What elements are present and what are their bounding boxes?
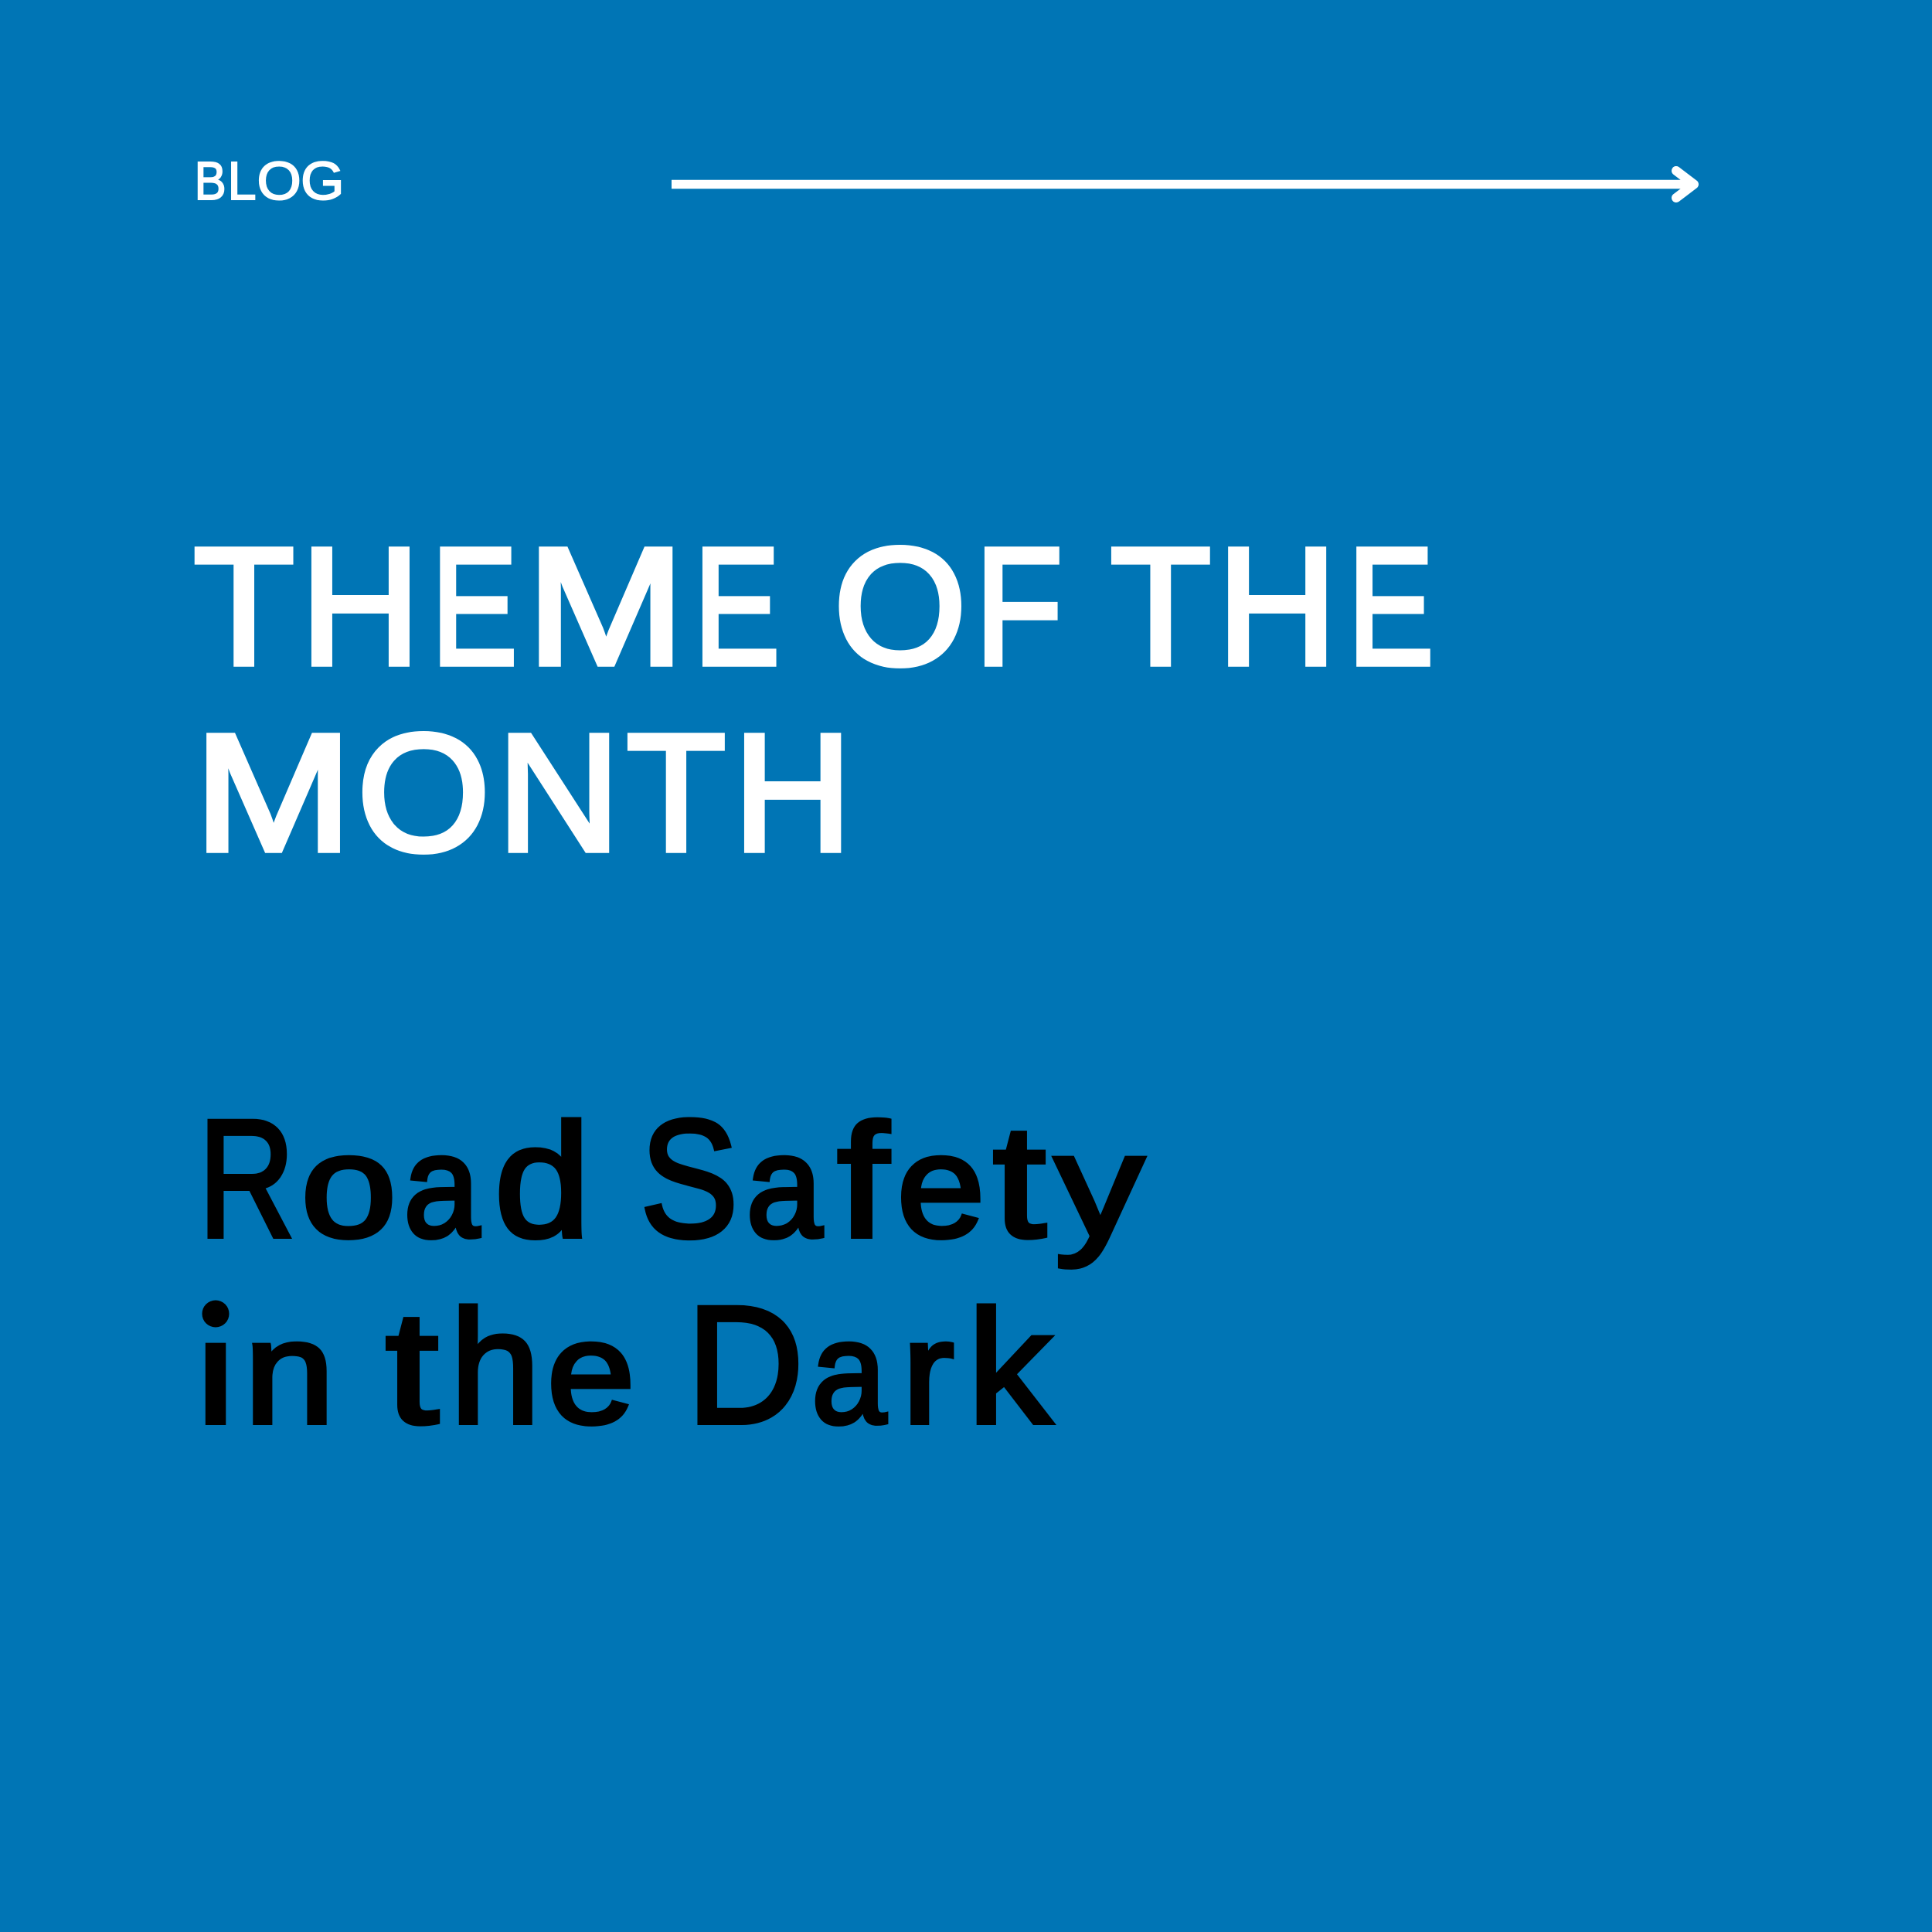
icon: long arrow [672, 171, 1694, 198]
heading: THEME OF THE MONTH: E [694, 512, 780, 699]
heading: THEME OF THE MONTH: T [627, 699, 726, 886]
heading: THEME OF THE MONTH: F [975, 512, 1063, 699]
subheading: Road Safety in the Dark: k [968, 1277, 1052, 1458]
subheading: Road Safety in the Dark: a [811, 1291, 886, 1454]
subheading: Road Safety in the Dark: f [837, 1091, 889, 1271]
heading: THEME OF THE MONTH: H [733, 699, 852, 886]
label: BLOG: L [227, 151, 257, 211]
subheading: Road Safety in the Dark: t [993, 1092, 1046, 1270]
subheading: Road Safety in the Dark: a [747, 1104, 822, 1268]
label: BLOG [195, 151, 345, 211]
subheading: Road Safety in the Dark: i [196, 1291, 235, 1454]
heading: THEME OF THE MONTH: O [357, 699, 490, 886]
heading: THEME OF THE MONTH: M [526, 512, 685, 699]
subheading: Road Safety in the Dark: R [199, 1085, 295, 1272]
label: BLOG: O [257, 151, 301, 211]
heading: THEME OF THE MONTH: E [1348, 512, 1434, 699]
subheading: Road Safety in the Dark: h [450, 1277, 540, 1458]
label: BLOG: B [195, 151, 226, 211]
heading: THEME OF THE MONTH: E [431, 512, 517, 699]
heading: THEME OF THE MONTH: T [1111, 512, 1211, 699]
subheading: Road Safety in the Dark: y [1055, 1102, 1144, 1268]
subheading: Road Safety in the Dark [196, 1085, 1144, 1458]
heading: THEME OF THE MONTH [193, 512, 1434, 886]
subheading: Road Safety in the Dark: a [403, 1104, 480, 1268]
subheading: Road Safety in the Dark: n [244, 1291, 335, 1454]
label: BLOG: G [301, 151, 345, 211]
heading: THEME OF THE MONTH: O [834, 512, 967, 699]
subheading: Road Safety in the Dark: r [902, 1291, 954, 1454]
subheading: Road Safety in the Dark: D [686, 1271, 804, 1458]
heading: THEME OF THE MONTH: M [194, 699, 352, 886]
subheading: Road Safety in the Dark: e [896, 1104, 985, 1268]
subheading: Road Safety in the Dark: t [386, 1278, 439, 1457]
subheading: Road Safety in the Dark: S [640, 1085, 738, 1272]
heading: THEME OF THE MONTH: H [301, 512, 420, 699]
heading: THEME OF THE MONTH: T [193, 512, 294, 699]
subheading: Road Safety in the Dark: e [547, 1291, 635, 1454]
subheading: Road Safety in the Dark: d [495, 1091, 590, 1271]
heading: THEME OF THE MONTH: H [1217, 512, 1337, 699]
subheading: Road Safety in the Dark: o [301, 1104, 396, 1268]
heading: THEME OF THE MONTH: N [497, 699, 621, 886]
